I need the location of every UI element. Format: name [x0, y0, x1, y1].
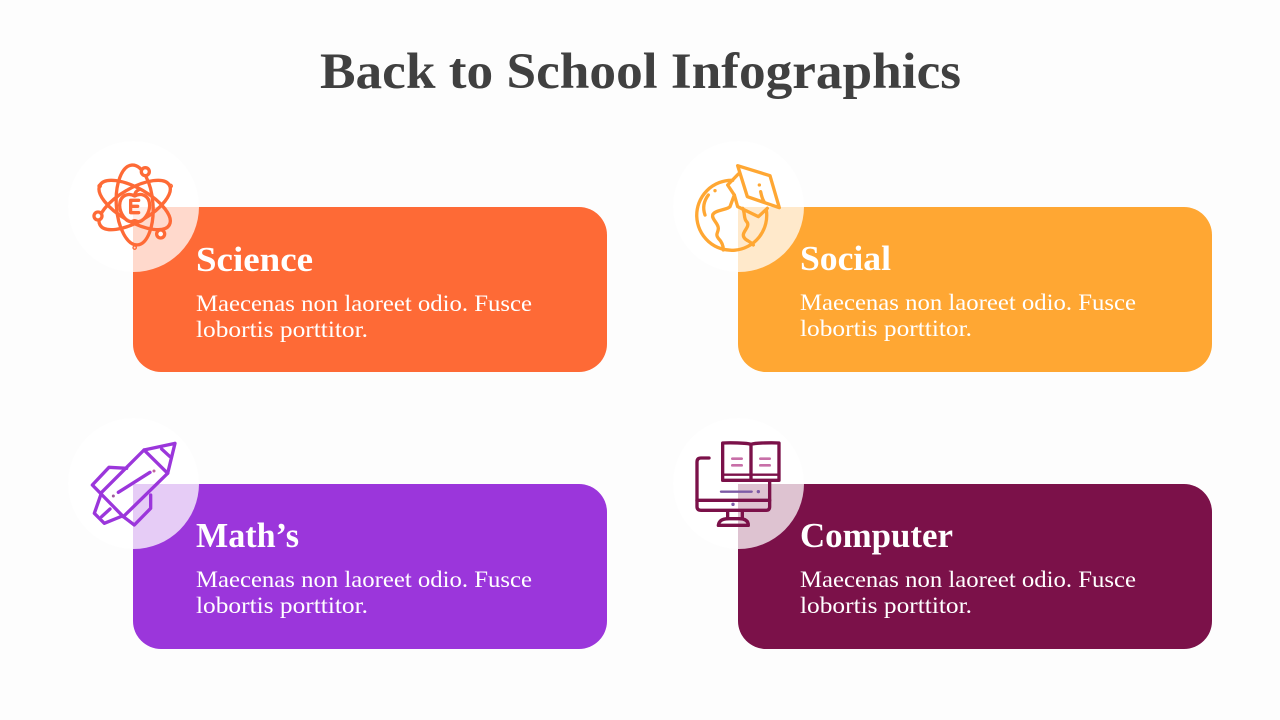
text: math description: Maecenas non laoreet odio. Fusce	[196, 567, 532, 593]
icon badge: social	[673, 141, 804, 272]
text: social description	[800, 290, 1136, 342]
text: computer description: lobortis porttitor.	[800, 593, 972, 619]
icon: atom with apple	[92, 164, 178, 248]
heading: social: Social	[800, 239, 891, 278]
text: social description: lobortis porttitor.	[800, 316, 972, 342]
panel: science	[68, 141, 607, 372]
icon badge: math	[68, 418, 199, 549]
icon badge: computer	[673, 418, 804, 549]
title: Back to School Infographics	[320, 44, 961, 100]
panel: social	[673, 141, 1212, 372]
text: computer description: Maecenas non laoreet odio. Fusce	[800, 567, 1136, 593]
card: science	[133, 207, 607, 372]
text: science description	[196, 291, 532, 343]
card: math	[133, 484, 607, 649]
icon badge: science	[68, 141, 199, 272]
heading: science: Science	[196, 240, 313, 279]
card: computer	[738, 484, 1212, 649]
card: social	[738, 207, 1212, 372]
text: science description: lobortis porttitor.	[196, 317, 368, 343]
panel: computer	[673, 418, 1212, 649]
text: social description: Maecenas non laoreet odio. Fusce	[800, 290, 1136, 316]
text: computer description	[800, 567, 1136, 619]
icon: globe with graduation cap	[697, 166, 779, 250]
icon: computer with book	[697, 443, 779, 525]
heading: math: Math’s	[196, 516, 299, 555]
panel: math	[68, 418, 607, 649]
heading: computer: Computer	[800, 516, 953, 555]
text: math description: lobortis porttitor.	[196, 593, 368, 619]
text: math description	[196, 567, 532, 619]
icon: pencil rocket	[92, 443, 175, 525]
text: science description: Maecenas non laoreet odio. Fusce	[196, 291, 532, 317]
